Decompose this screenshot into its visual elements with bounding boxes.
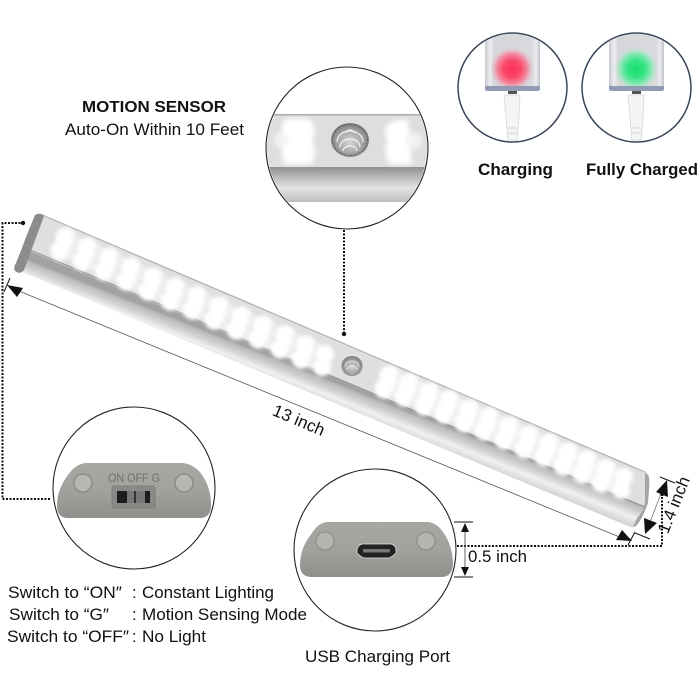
callout: USB port zoom bbox=[294, 469, 456, 631]
label: 0.5 inch: 0.5 inch bbox=[468, 547, 527, 566]
instruction: OFF: : bbox=[132, 628, 137, 646]
bar front rounded face bbox=[22, 250, 645, 527]
switch labels: ON OFF G bbox=[108, 473, 160, 485]
switch instructions bbox=[7, 584, 307, 646]
0.5 inch dimension bbox=[454, 522, 473, 577]
slider switch bbox=[112, 486, 155, 508]
micro USB port bbox=[357, 544, 396, 558]
end cap with port bbox=[300, 522, 453, 577]
label: charging: Charging bbox=[478, 160, 553, 179]
instruction: ON: Constant Lighting bbox=[142, 584, 274, 602]
light bar product bbox=[14, 214, 649, 527]
LED strip right bbox=[372, 363, 633, 499]
dotted leader: switch callout to bar end bbox=[2, 221, 50, 499]
end cap with switch bbox=[57, 463, 211, 518]
instruction: ON bbox=[8, 584, 274, 602]
label: fully charged: Fully Charged bbox=[586, 160, 698, 179]
1.4 inch dimension bbox=[635, 477, 675, 539]
callout: charging indicator bbox=[458, 30, 567, 142]
13 inch dimension line bbox=[4, 278, 635, 545]
LED strip left bbox=[48, 225, 334, 376]
label: USB charging port: USB Charging Port bbox=[305, 647, 450, 666]
instruction: ON: : bbox=[132, 584, 137, 602]
sensor lens bbox=[331, 123, 369, 157]
callout: motion sensor zoom bbox=[266, 67, 428, 229]
instruction: ON: Switch to “ON″ bbox=[8, 584, 122, 602]
instruction: G: : bbox=[132, 606, 137, 624]
bar top face bbox=[27, 214, 645, 507]
label: 13 inch: 13 inch bbox=[270, 401, 328, 440]
instruction: OFF: No Light bbox=[142, 628, 206, 646]
instruction: G: Switch to “G″ bbox=[9, 606, 109, 624]
instruction: OFF: Switch to “OFF″ bbox=[7, 628, 129, 646]
label: 1.4 inch: 1.4 inch bbox=[654, 474, 694, 536]
dotted leader: sensor callout to bar bbox=[342, 230, 346, 336]
instruction: G bbox=[9, 606, 307, 624]
instruction: OFF bbox=[7, 628, 206, 646]
dotted leader: port callout to bar end bbox=[457, 492, 664, 546]
text: auto-on range: Auto-On Within 10 Feet bbox=[65, 120, 244, 139]
left end cap bbox=[14, 214, 44, 273]
callout: fully charged indicator bbox=[582, 30, 691, 142]
motion sensor on bar bbox=[342, 356, 362, 376]
heading: motion sensor: MOTION SENSOR bbox=[82, 99, 226, 116]
callout: switch end zoom bbox=[53, 407, 215, 569]
right end strip bbox=[633, 472, 649, 527]
instruction: G: Motion Sensing Mode bbox=[142, 606, 307, 624]
